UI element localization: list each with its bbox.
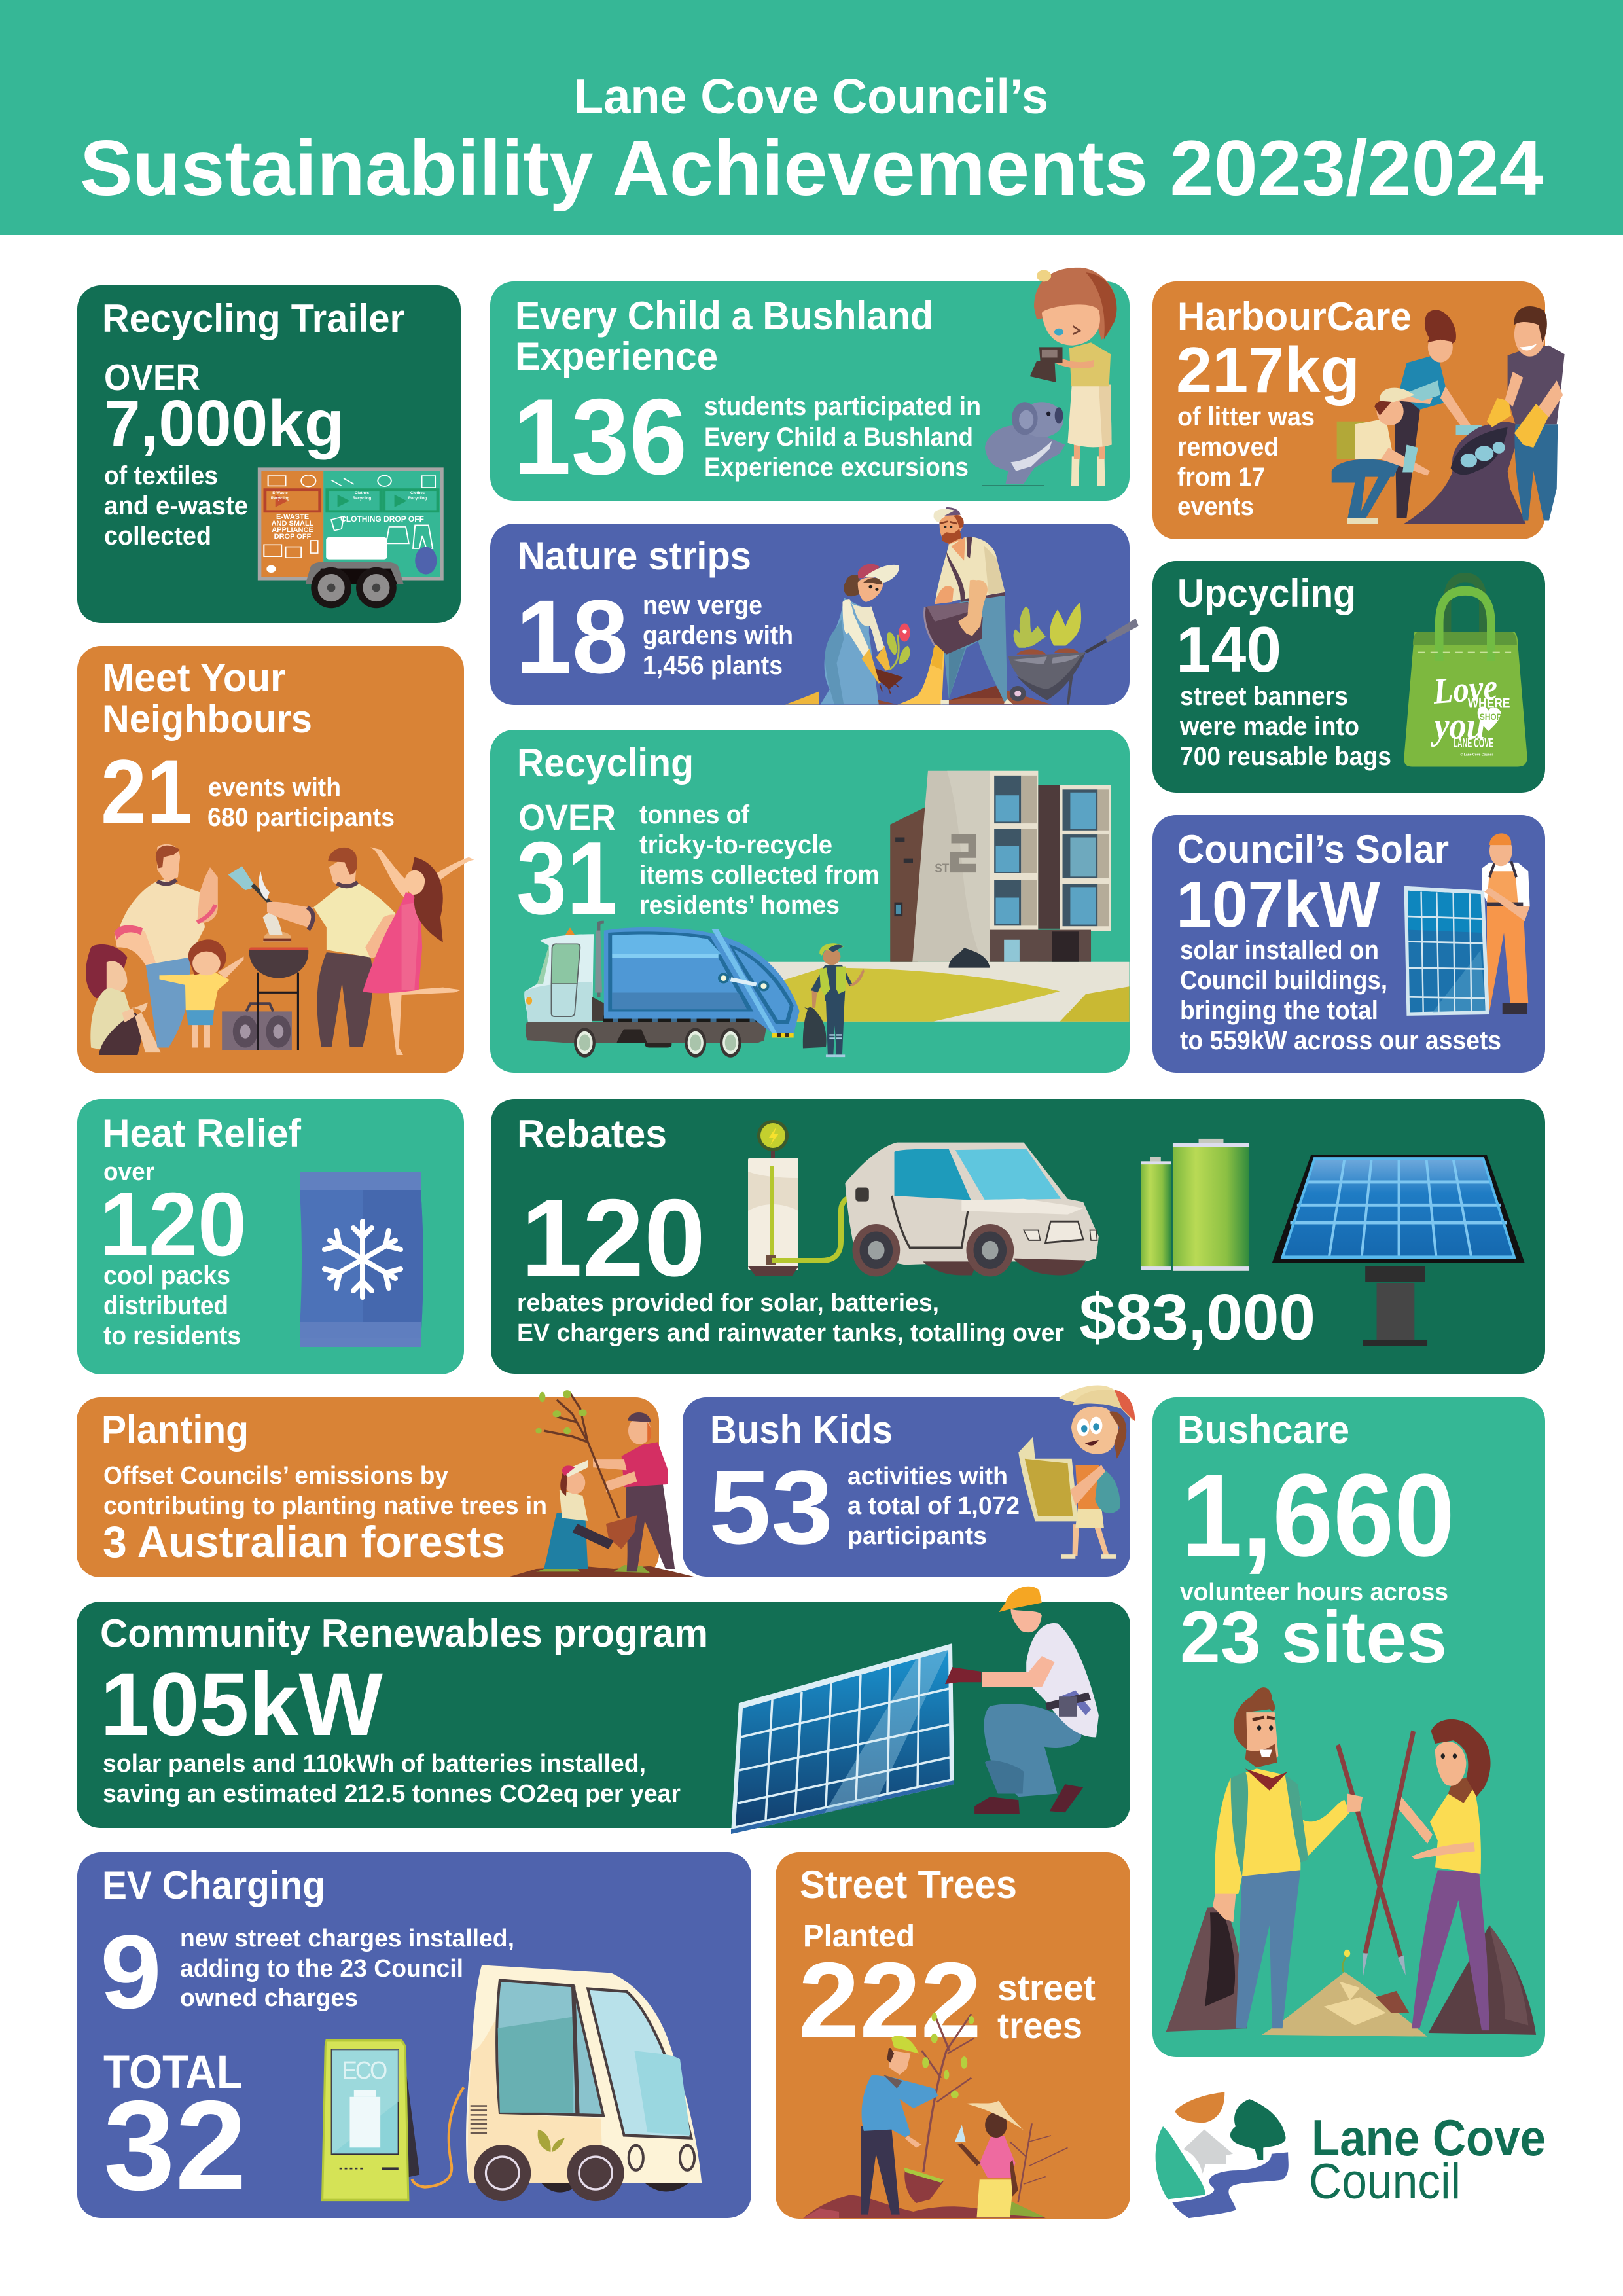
panel: street trees (776, 1852, 1130, 2219)
heading: council's solar: Council’s Solar (1177, 827, 1449, 871)
stat: over 120: 120 (99, 1174, 247, 1275)
grill (249, 931, 308, 1050)
stat: 53: 53 (709, 1448, 833, 1566)
logo wordmark: Lane Cove (1311, 2109, 1546, 2166)
text: events and participants: 680 participants (207, 803, 395, 832)
wheelbarrow (1008, 619, 1139, 704)
stat: 107kW: 107kW (1176, 868, 1381, 941)
illustration: electric car (845, 1143, 1099, 1276)
plants (1014, 603, 1081, 655)
icon: reusable tote bag: WHERE (1468, 695, 1510, 710)
icon: recycling trailer (258, 467, 444, 608)
text: street banners (1179, 682, 1391, 771)
text: offset emissions (103, 1462, 547, 1520)
right rubbish bag (1429, 1925, 1536, 2035)
heading: meet your neighbours: Meet Your (102, 656, 285, 700)
icon: reusable tote bag: SHOP (1480, 712, 1502, 722)
woman (544, 1460, 614, 1569)
heading: every child a bushland experience: Every Child a Bushland (515, 294, 933, 338)
text: new verge gardens: 1,456 plants (643, 651, 783, 680)
text: solar installed: Council buildings, (1180, 966, 1387, 995)
text: street banners: were made into (1179, 712, 1359, 741)
text: street trees: trees (997, 2005, 1082, 2046)
stat: 18: 18 (516, 578, 628, 695)
text: events and participants: events with (208, 773, 341, 802)
woman (1399, 1719, 1491, 2030)
stat: over 120: over (103, 1158, 154, 1186)
litter pickers (1338, 1731, 1414, 1960)
text: cool packs: to residents (103, 1321, 241, 1350)
heading: recycling trailer: Recycling Trailer (102, 296, 404, 340)
text: cool packs (103, 1261, 241, 1350)
icon: cool pack with snowflake (300, 1172, 423, 1347)
stat: over 31: 31 (516, 821, 617, 936)
left man (115, 844, 218, 1048)
text: offset emissions: contributing to planting native trees in (103, 1492, 547, 1520)
text: solar installed (1180, 936, 1501, 1055)
stat: total 32: 32 (103, 2074, 247, 2217)
illustration: girl with camera and koala (982, 268, 1116, 486)
left rubbish bag (1166, 1907, 1247, 2032)
text: solar panels and batteries: solar panels and 110kWh of batteries installed, (103, 1750, 646, 1778)
text: solar installed: solar installed on (1180, 936, 1379, 965)
text: students participated: Experience excursions (704, 453, 969, 482)
girl top (1069, 342, 1111, 386)
text: students participated: Every Child a Bushland (704, 423, 973, 452)
spatula and knife (228, 866, 283, 935)
stat: 9: 9 (100, 1913, 162, 2030)
panel: rebates (491, 1099, 1545, 1374)
man (933, 507, 1013, 704)
heading: bush kids: Bush Kids (710, 1408, 893, 1452)
building sign: ST (935, 861, 950, 875)
icon: recycling trailer: APPLIANCE (272, 526, 313, 534)
heading: recycling: Recycling (517, 741, 694, 785)
panel: recycling (490, 730, 1130, 1073)
illustration: solar installer with panel (1404, 833, 1530, 1016)
seated woman (86, 944, 161, 1055)
panel: community renewables program (77, 1587, 1130, 1834)
icon: batteries (1141, 1139, 1249, 1271)
logo: Lane Cove Council (1156, 2092, 1546, 2218)
text: street trees (997, 1967, 1096, 2046)
icon: recycling trailer: AND SMALL (272, 520, 314, 528)
title: council name: Lane Cove Council’s (574, 69, 1048, 124)
illustration: solar panel (731, 1643, 954, 1834)
stat: 21: 21 (101, 740, 192, 843)
panel: harbourcare (1152, 281, 1565, 539)
illustration: bushcare volunteers (1166, 1687, 1536, 2037)
text: textiles and e-waste: and e-waste (104, 492, 248, 520)
ground (508, 1566, 696, 1577)
icon: reusable tote bag: Love (1431, 667, 1499, 712)
man (593, 1412, 675, 1571)
illustration: harbour clean-up volunteers (1332, 306, 1565, 524)
illustration: apartment building (687, 771, 1130, 1022)
panel: bushcare (1152, 1397, 1545, 2057)
text: textiles and e-waste (104, 461, 248, 550)
text: tricky-to-recycle items: tonnes of (639, 800, 750, 829)
icon: reusable tote bag: you (1431, 705, 1486, 747)
heading: every child a bushland experience (515, 294, 933, 378)
text: cool packs: cool packs (103, 1261, 230, 1290)
child (159, 939, 243, 1048)
hair and face (1034, 268, 1116, 340)
text: rebates description: EV chargers and rainwater tanks, totalling over (517, 1319, 1064, 1347)
litter pile (1262, 1972, 1427, 2037)
text: tricky-to-recycle items: residents’ homes (639, 891, 840, 920)
heading: street trees: Street Trees (800, 1863, 1017, 1907)
stat: 1,660: 1,660 (1181, 1450, 1455, 1581)
text: students participated (704, 392, 981, 482)
text: solar installed: to 559kW across our assets (1180, 1026, 1501, 1055)
icon: recycling trailer: DROP OFF (274, 533, 312, 541)
text: activities (847, 1463, 1020, 1550)
man (1213, 1687, 1363, 2028)
building wing (990, 771, 1111, 962)
heading: ev charging: EV Charging (102, 1863, 325, 1907)
stat: 140: 140 (1176, 613, 1281, 685)
stat: total 32: TOTAL (103, 2047, 243, 2098)
icon: recycling trailer: Clothes (410, 492, 425, 495)
panel: every child a bushland experience (490, 268, 1130, 501)
building sign (935, 834, 976, 875)
text: new verge gardens: new verge (643, 591, 762, 620)
text: street banners: 700 reusable bags (1180, 742, 1391, 771)
yellow soil (897, 639, 944, 704)
illustration: garbage truck and worker (524, 921, 865, 1058)
electric vehicle (466, 1965, 702, 2201)
illustration: kneeling solar installer (945, 1587, 1099, 1814)
panel: ev charging (77, 1852, 751, 2218)
right man (267, 848, 400, 1047)
illustration: gardeners with wheelbarrow (785, 507, 1139, 704)
text: solar panels and batteries: saving an estimated 212.5 tonnes CO2eq per year (103, 1780, 681, 1808)
text: offset emissions: Offset Councils’ emissions by (103, 1462, 448, 1490)
heading: planting: Planting (101, 1408, 249, 1452)
camera (1030, 347, 1063, 382)
kneeling man (1332, 388, 1430, 524)
icon: recycling trailer: E-Waste (272, 492, 288, 495)
stat: $83,000: $83,000 (1079, 1281, 1315, 1354)
heading: meet your neighbours: Neighbours (102, 697, 312, 741)
man (861, 2036, 938, 2215)
bare tree (1010, 2123, 1067, 2202)
icon: recycling trailer: Recycling (353, 497, 372, 501)
icon: reusable tote bag (1404, 577, 1527, 766)
charging station (323, 2041, 419, 2200)
panel: planting (77, 1390, 696, 1577)
logo wordmark: Council (1309, 2154, 1461, 2210)
stat: 120 rebates: 120 (521, 1176, 705, 1299)
text: events and participants (207, 773, 395, 832)
text: street banners: street banners (1180, 682, 1348, 711)
koala (982, 402, 1065, 486)
heading: community renewables program: Community Renewables program (100, 1611, 708, 1655)
standing woman (1395, 310, 1482, 518)
logo emblem (1156, 2092, 1289, 2218)
truck body (524, 921, 800, 1047)
text: tricky-to-recycle items: tricky-to-recycle (639, 831, 832, 859)
building core (890, 771, 990, 962)
ground (785, 686, 1052, 704)
heading: heat relief: Heat Relief (102, 1111, 302, 1155)
text: litter removed: removed (1177, 433, 1279, 461)
icon: EV wall charger (748, 1120, 798, 1276)
icon: recycling trailer: E-WASTE (276, 513, 309, 521)
text: rebates description (517, 1289, 1064, 1347)
solar panel (1404, 886, 1489, 1016)
text: new street charges: adding to the 23 Council (180, 1955, 463, 1982)
text: litter removed: events (1177, 492, 1254, 521)
text: new verge gardens: gardens with (643, 621, 793, 650)
woman (955, 2100, 1024, 2217)
text: planted: Planted (803, 1919, 915, 1954)
worker (803, 943, 865, 1057)
heading: meet your neighbours (102, 656, 312, 741)
boombox (222, 1003, 292, 1050)
charging station: ECO (342, 2056, 387, 2085)
girl legs (1071, 456, 1105, 486)
illustration: child with map (1018, 1386, 1135, 1559)
text: activities: participants (847, 1522, 987, 1550)
text: tricky-to-recycle items: items collected from (639, 861, 880, 889)
text: litter removed: from 17 (1177, 463, 1265, 492)
heading: bushcare: Bushcare (1177, 1408, 1349, 1452)
text: street trees: street (997, 1967, 1096, 2008)
heading: harbourcare: HarbourCare (1177, 295, 1412, 338)
dancing woman (363, 847, 474, 1055)
icon: reusable tote bag: © Lane Cove Council (1461, 752, 1494, 757)
text: solar installed: bringing the total (1180, 996, 1378, 1025)
illustration: neighbours barbecue (86, 844, 474, 1055)
illustration: EV charging station and car (323, 1965, 702, 2201)
heading: nature strips: Nature strips (518, 534, 751, 578)
installer (1482, 833, 1530, 1014)
heading: upcycling: Upcycling (1177, 571, 1356, 615)
ground band (687, 962, 1130, 1022)
charging cable (412, 2087, 463, 2187)
tree (535, 1390, 637, 1549)
header banner (0, 0, 1623, 235)
panel: bush kids (683, 1386, 1135, 1577)
icon: recycling trailer: Recycling (271, 497, 289, 501)
stat: over 7,000kg: OVER (104, 357, 200, 399)
icon: solar panel on stand (1272, 1155, 1525, 1346)
stat: 23 sites: 23 sites (1180, 1596, 1447, 1678)
text: solar panels and batteries (103, 1750, 681, 1808)
text: students participated: students participated in (704, 392, 981, 421)
text: textiles and e-waste: of textiles (104, 461, 218, 490)
bucket (924, 602, 983, 655)
text: activities: activities with (847, 1463, 1008, 1490)
panel: recycling trailer (77, 285, 461, 623)
text: tricky-to-recycle items (639, 800, 880, 920)
illustration: tree planters (803, 2013, 1067, 2218)
stat: 222: 222 (798, 1940, 982, 2060)
title: main heading: Sustainability Achievements 2023/2024 (80, 124, 1543, 212)
girl skirt (1067, 385, 1112, 447)
stat: 136: 136 (513, 376, 687, 497)
rubbish bags (949, 948, 990, 968)
panel: heat relief (77, 1099, 464, 1374)
panel: upcycling (1152, 561, 1545, 793)
man with gloves (1487, 306, 1565, 521)
panel: nature strips (490, 507, 1139, 705)
text: new street charges: new street charges installed, (180, 1925, 514, 1952)
stat: 217kg: 217kg (1176, 334, 1360, 406)
rubbish bag (1404, 422, 1525, 524)
text: litter removed: of litter was (1177, 403, 1315, 431)
stat: over 7,000kg: 7,000kg (104, 387, 344, 460)
text: new street charges: owned charges (180, 1984, 358, 2012)
stat: over 31: OVER (518, 797, 616, 838)
text: textiles and e-waste: collected (104, 522, 211, 550)
text: volunteer hours: volunteer hours across (1180, 1579, 1448, 1606)
icon: recycling trailer: CLOTHING DROP OFF (340, 514, 424, 524)
icon: reusable tote bag: LANE COVE (1454, 736, 1493, 751)
soil (803, 2195, 1046, 2218)
panel: meet your neighbours (77, 646, 474, 1073)
logo wordmark (1309, 2109, 1546, 2210)
icon: recycling trailer: Clothes (355, 492, 370, 495)
text: rebates description: rebates provided for solar, batteries, (517, 1289, 939, 1317)
illustration: planting a tree (508, 1390, 696, 1577)
truck compactor (604, 927, 800, 1034)
panel: council's solar (1152, 815, 1545, 1073)
text: activities: a total of 1,072 (847, 1492, 1020, 1520)
heading: every child a bushland experience: Experience (515, 334, 718, 378)
tree (921, 2014, 974, 2172)
woman (821, 564, 910, 704)
heading: rebates: Rebates (517, 1112, 667, 1156)
stat: 105kW: 105kW (100, 1655, 383, 1755)
charging cable (772, 1194, 861, 1261)
truck wheels (574, 1028, 741, 1058)
stat: 3 Australian forests: 3 Australian forests (103, 1517, 505, 1567)
text: litter removed (1177, 403, 1315, 521)
icon: recycling trailer: Recycling (408, 497, 427, 501)
text: new verge gardens (643, 591, 793, 680)
text: cool packs: distributed (103, 1291, 228, 1320)
text: new street charges (180, 1925, 514, 2012)
